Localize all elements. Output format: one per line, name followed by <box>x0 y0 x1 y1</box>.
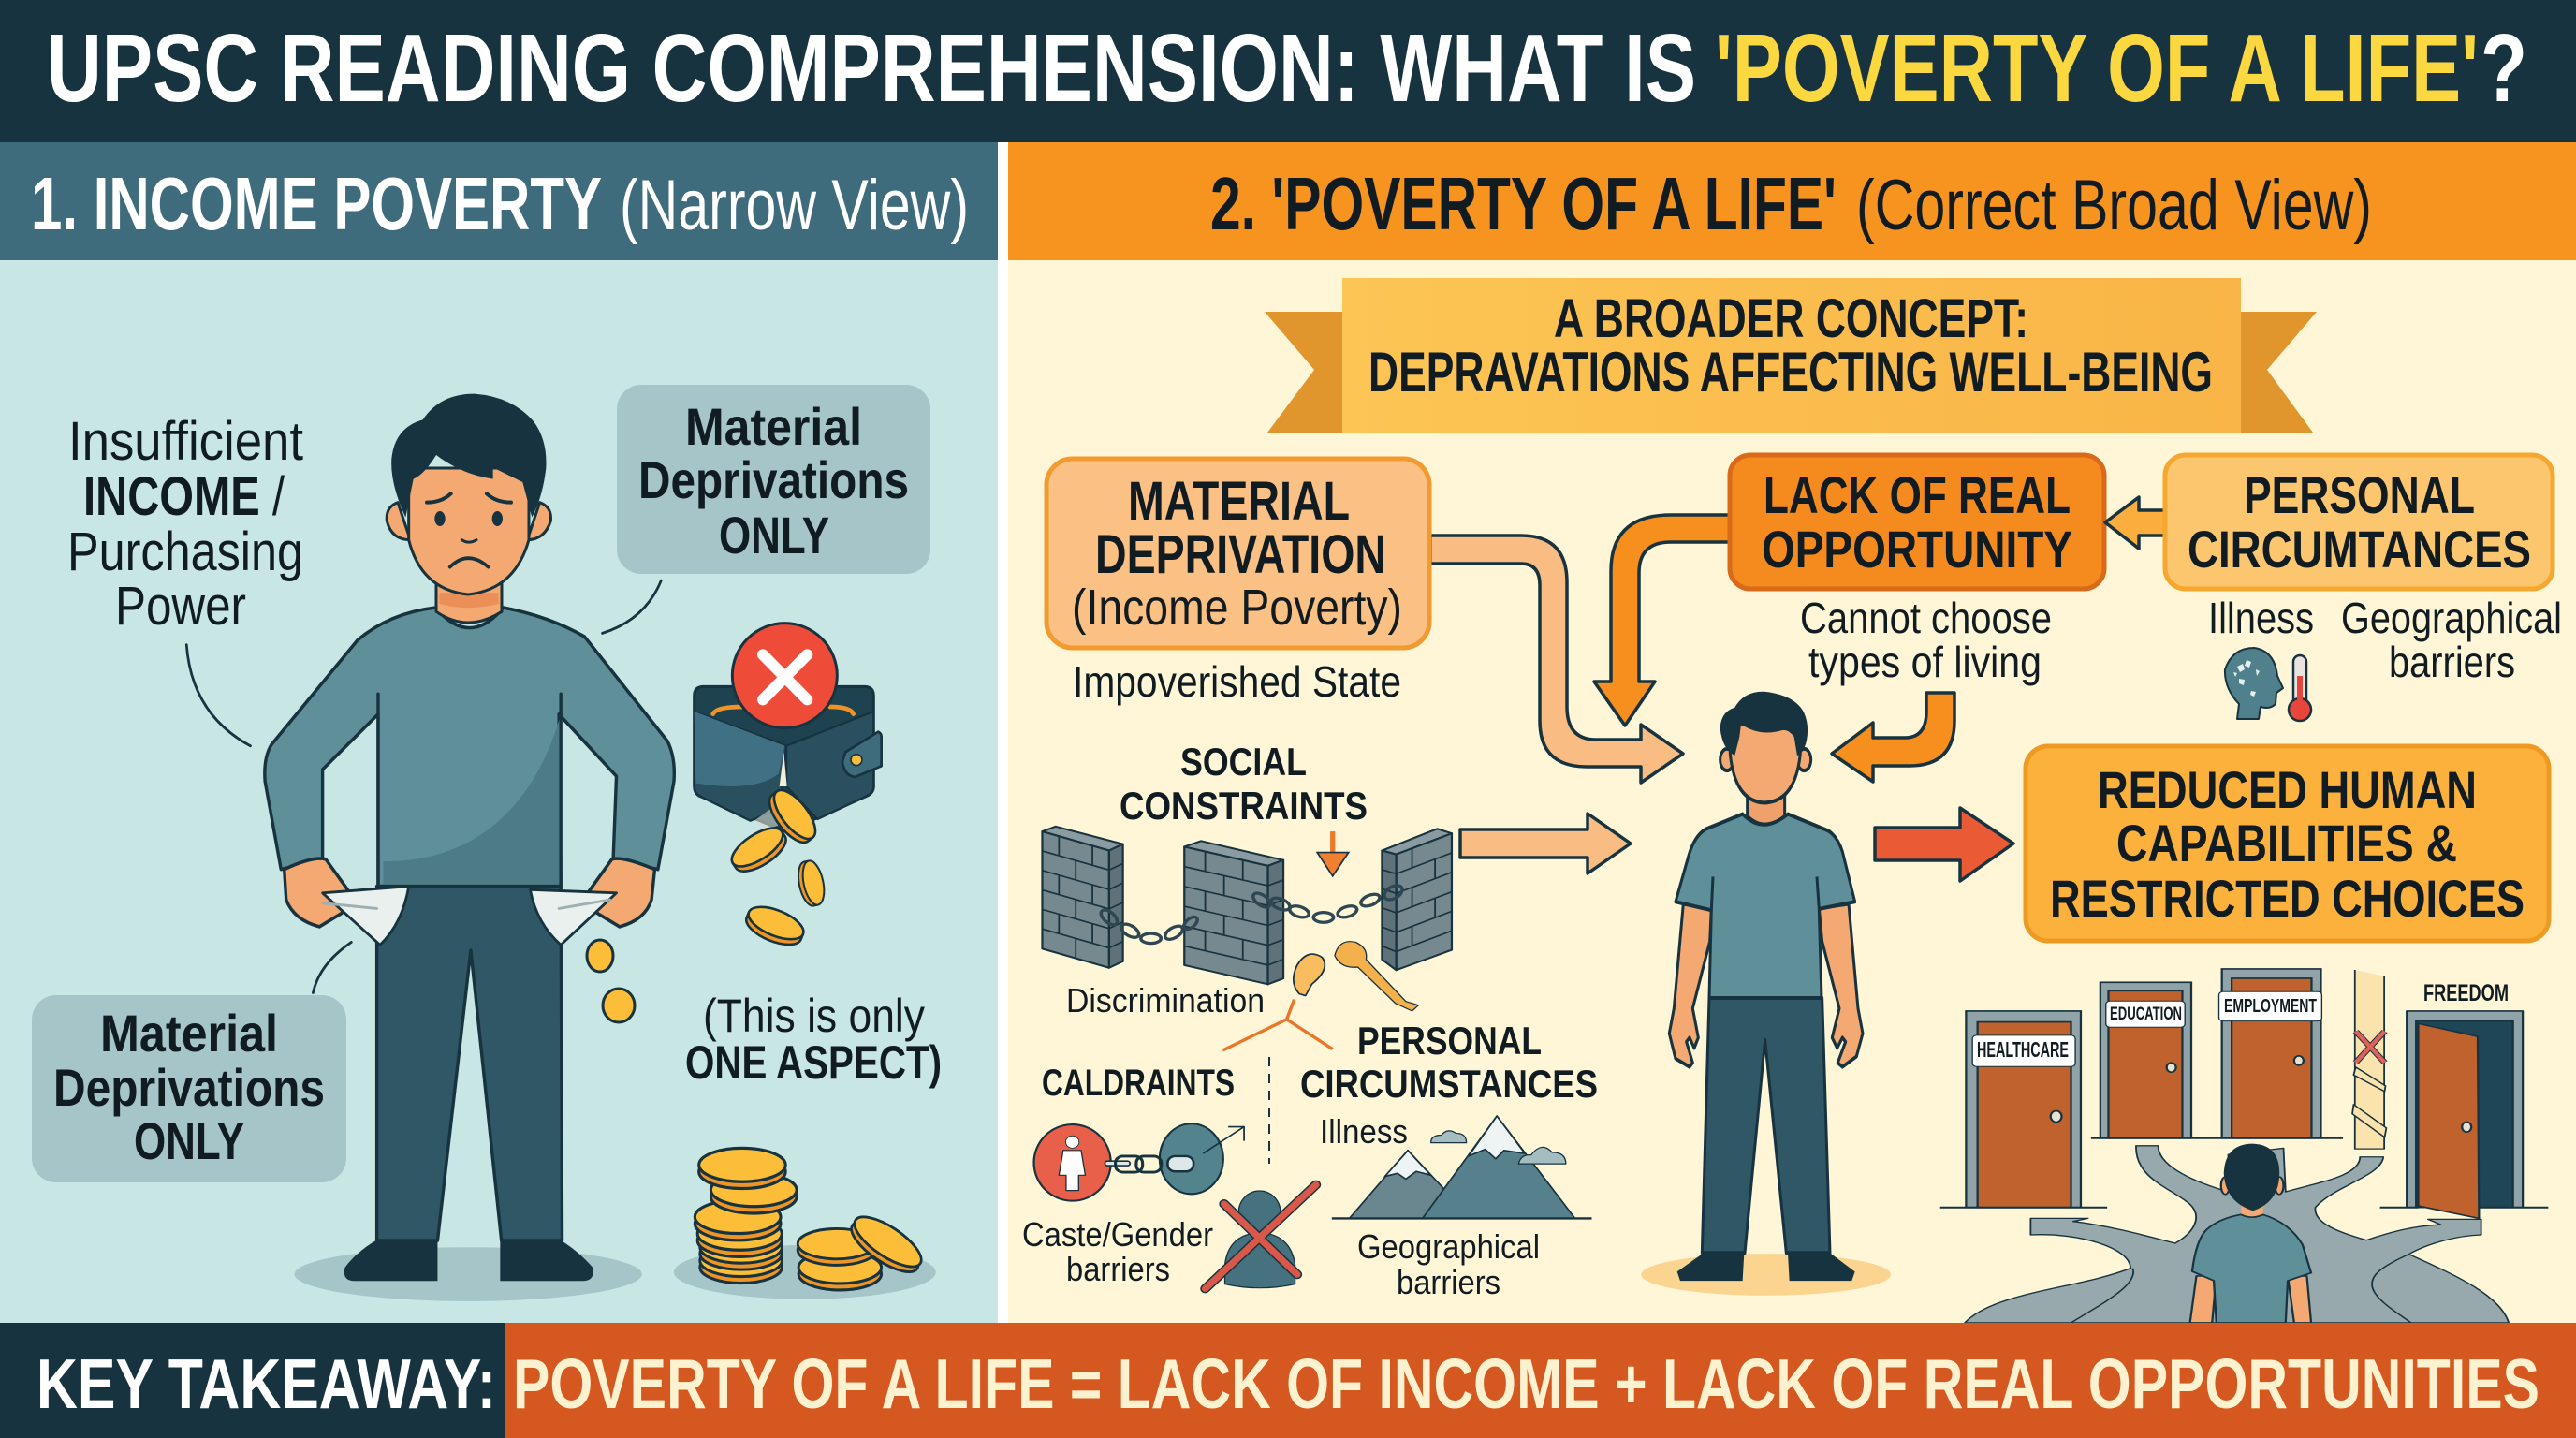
arrow: social constraints to person <box>1460 814 1631 873</box>
heading: personal circumstances: CIRCUMSTANCES <box>1300 1062 1598 1106</box>
callout: material deprivations right: Material <box>685 397 862 456</box>
note: one aspect: (This is only <box>703 990 925 1042</box>
doors: education and employment: EMPLOYMENT <box>2224 996 2317 1017</box>
callout: material deprivations right: ONLY <box>719 506 829 565</box>
label: geographical barriers small: Geographical <box>1357 1227 1540 1266</box>
box: material deprivation: MATERIAL <box>1128 471 1350 532</box>
heading: caldraints: CALDRAINTS <box>1042 1063 1235 1104</box>
door: healthcare <box>1940 1011 2107 1208</box>
illustration: empty wallet <box>695 624 882 831</box>
right panel header <box>1008 142 2576 260</box>
box: personal circumstances <box>2165 455 2553 589</box>
icon: head and thermometer <box>2225 648 2311 721</box>
illustration: brick walls and chains <box>1042 827 1452 984</box>
illustration: mountains and clouds <box>1332 1116 1591 1218</box>
box: lack of real opportunity <box>1730 455 2104 589</box>
left panel header: 1. INCOME POVERTY <box>31 162 602 245</box>
man's head and face <box>387 394 550 623</box>
doors: education and employment <box>2091 969 2343 1138</box>
doors: education and employment: EDUCATION <box>2110 1005 2182 1024</box>
icon: bound pillar with cross <box>2352 970 2386 1149</box>
box: reduced human capabilities: REDUCED HUMAN <box>2098 760 2477 819</box>
illustration: person from behind <box>2190 1144 2311 1323</box>
label: impoverished state: Impoverished State <box>1073 657 1401 706</box>
box: lack of real opportunity: OPPORTUNITY <box>1762 520 2072 579</box>
box: reduced human capabilities: CAPABILITIES & <box>2116 814 2457 873</box>
label: insufficient income: Insufficient <box>68 411 303 472</box>
icon: chained person <box>1034 1123 1244 1201</box>
door: freedom: FREEDOM <box>2423 980 2509 1006</box>
footer: key takeaway: KEY TAKEAWAY: <box>37 1344 496 1423</box>
icon: crossed out person <box>1206 1185 1316 1288</box>
illustration: sad man with empty pockets <box>186 394 674 1301</box>
label: cannot choose: types of living <box>1808 638 2042 686</box>
box: material deprivation: (Income Poverty) <box>1072 580 1402 636</box>
label: caste gender barriers <box>1022 1215 1213 1288</box>
divider: dashed line <box>1268 1057 1270 1164</box>
label: caste gender barriers: Caste/Gender <box>1022 1215 1213 1254</box>
callout: material deprivations right: Deprivations <box>638 450 909 509</box>
label: illness small: Illness <box>1320 1112 1408 1151</box>
icon: falling coins <box>587 784 827 1022</box>
title: UPSC READING COMPREHENSION: WHAT IS <box>47 14 1696 122</box>
box: material deprivation <box>1046 459 1429 648</box>
left panel header <box>0 142 998 260</box>
note: one aspect <box>685 990 942 1089</box>
arrow: small orange down <box>1317 831 1349 876</box>
label: discrimination: Discrimination <box>1066 981 1265 1020</box>
box: reduced human capabilities <box>2026 746 2549 941</box>
label: insufficient income <box>67 411 303 637</box>
arrow: person to reduced capabilities <box>1875 808 2013 881</box>
callout: material deprivations left: ONLY <box>134 1111 244 1170</box>
heading: social constraints: CONSTRAINTS <box>1120 784 1368 828</box>
panel: income poverty <box>0 260 998 1323</box>
heading: social constraints: SOCIAL <box>1180 740 1307 784</box>
callout: material deprivations left: Deprivations <box>53 1058 325 1117</box>
callout: material deprivations left: Material <box>100 1004 278 1063</box>
heading: personal circumstances <box>1300 1019 1598 1106</box>
title: ? <box>2481 14 2527 122</box>
callout: material deprivations left <box>32 995 346 1182</box>
label: illness and geographical barriers: barriers <box>2389 638 2515 686</box>
icon: bulbs and branching lines <box>1222 942 1418 1050</box>
label: cannot choose <box>1800 594 2052 686</box>
label: insufficient income: Power <box>115 576 246 637</box>
illustration: stacks of coins <box>674 1148 936 1299</box>
box: personal circumstances: PERSONAL <box>2244 465 2475 524</box>
arrow: personal circumstances to lack of opportunity <box>2105 497 2165 549</box>
heading: social constraints <box>1120 740 1368 828</box>
label: geographical barriers small: barriers <box>1397 1263 1500 1301</box>
label: caste gender barriers: barriers <box>1066 1250 1170 1288</box>
box: material deprivation: DEPRIVATION <box>1095 524 1386 585</box>
heading: personal circumstances: PERSONAL <box>1357 1019 1542 1063</box>
label: insufficient income: Purchasing <box>67 521 303 582</box>
callout: material deprivations right <box>617 385 930 574</box>
label: geographical barriers small <box>1357 1227 1540 1301</box>
door: healthcare: HEALTHCARE <box>1977 1037 2069 1062</box>
header band <box>0 0 2576 142</box>
label: illness and geographical barriers: Illness <box>2208 594 2314 642</box>
panel: poverty of a life <box>1008 260 2576 1323</box>
illustration: crossroads roads <box>1965 1146 2509 1323</box>
banner: broader concept: DEPRAVATIONS AFFECTING WELL-BEING <box>1368 341 2213 404</box>
banner: broader concept: A BROADER CONCEPT: <box>1554 288 2028 349</box>
arrow: curved into person from right <box>1832 693 1954 782</box>
banner: broader concept <box>1265 278 2317 433</box>
right panel header: 2. 'POVERTY OF A LIFE' <box>1210 162 1837 245</box>
right panel header: (Correct Broad View) <box>1856 166 2372 245</box>
door: freedom <box>2380 980 2548 1218</box>
arrow: material deprivation to person <box>1430 536 1683 783</box>
arrow: lack of opportunity to person <box>1594 515 1730 726</box>
note: one aspect: ONE ASPECT) <box>685 1036 942 1089</box>
label: insufficient income: INCOME / <box>83 466 285 527</box>
label: illness and geographical barriers <box>2208 594 2562 686</box>
footer: key takeaway <box>0 1323 2576 1438</box>
illustration: central person <box>1641 692 1891 1296</box>
box: lack of real opportunity: LACK OF REAL <box>1764 465 2071 524</box>
label: cannot choose: Cannot choose <box>1800 594 2052 642</box>
left panel header: (Narrow View) <box>620 166 969 245</box>
